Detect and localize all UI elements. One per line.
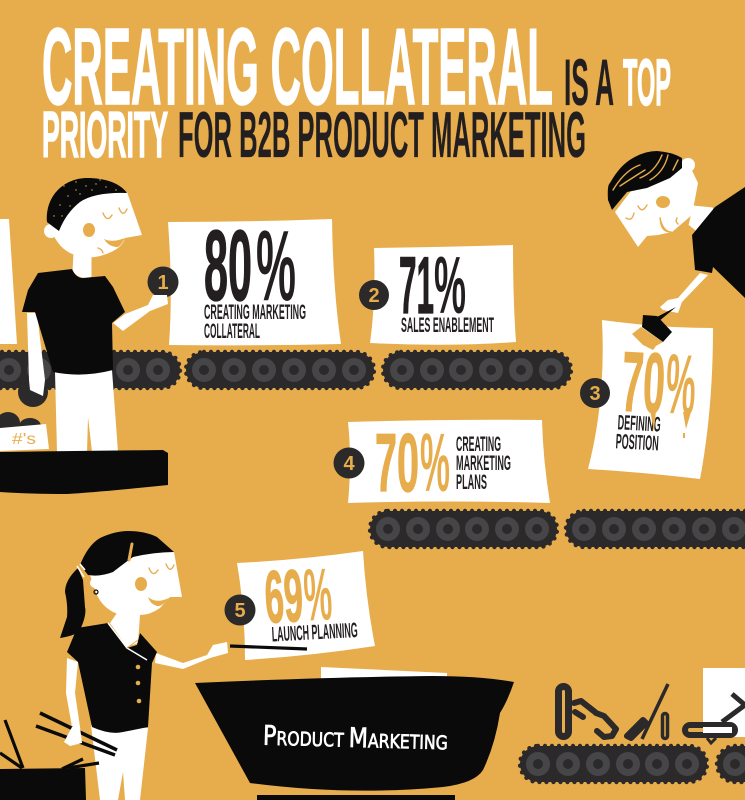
- title: PRIORITY: [42, 98, 168, 171]
- badge 1: 1: [157, 272, 169, 294]
- character: man painting: [608, 151, 745, 350]
- stat card 1: 80% creating marketing collateral: COLLATERAL: [204, 320, 260, 343]
- stat card 1: 80% creating marketing collateral: CREATING MARKETING: [204, 301, 306, 324]
- pointer stick: [230, 646, 307, 649]
- stat card 3: 70% defining position: POSITION: [615, 430, 659, 456]
- hopper: product marketing: PRODUCT MARKETING: [263, 721, 448, 756]
- stat card 5: 69% launch planning: [237, 551, 375, 660]
- title: [42, 6, 671, 171]
- stat card 5: 69% launch planning: %: [302, 552, 334, 637]
- stat card 4: 70% creating marketing plans: %: [420, 416, 450, 509]
- paper: left edge: [0, 219, 17, 344]
- badge 2: [359, 280, 389, 310]
- conveyor belt: bottom right: [717, 746, 745, 782]
- character: man with numbers: [0, 178, 168, 452]
- conveyor belt: bottom: [520, 746, 707, 782]
- stat card 4: 70% creating marketing plans: MARKETING: [456, 452, 511, 475]
- stat card 5: 69% launch planning: 69: [263, 554, 305, 639]
- stat card 2: 71% sales enablement: 71: [399, 241, 434, 331]
- stat card 2: 71% sales enablement: [370, 241, 516, 345]
- character: man with numbers: #'s: [12, 431, 36, 448]
- badge 4: 4: [343, 453, 355, 475]
- stat card 4: 70% creating marketing plans: CREATING: [456, 433, 501, 456]
- badge 5: [224, 594, 256, 626]
- conveyor belt: right: [566, 511, 745, 547]
- box with sticks: [0, 720, 99, 800]
- hopper: product marketing: [195, 676, 514, 800]
- badge 4: [334, 448, 364, 478]
- stat card 5: 69% launch planning: LAUNCH PLANNING: [271, 619, 358, 647]
- stat card 2: 71% sales enablement: SALES ENABLEMENT: [401, 314, 494, 337]
- stat card 3: 70% defining position: 70: [619, 335, 667, 432]
- stat card 2: 71% sales enablement: %: [434, 241, 466, 331]
- platform: [0, 450, 168, 494]
- stat card 3: 70% defining position: %: [663, 337, 698, 433]
- conveyor belt: 1: [186, 352, 374, 388]
- stat card 1: 80% creating marketing collateral: 80: [204, 210, 252, 322]
- stat card 3: 70% defining position: [588, 320, 713, 479]
- stat card 4: 70% creating marketing plans: [348, 416, 550, 509]
- badge 5: 5: [234, 600, 246, 622]
- stat card 1: 80% creating marketing collateral: [168, 210, 341, 345]
- broken chain links: [558, 684, 745, 743]
- badge 1: [148, 266, 178, 298]
- badge 2: 2: [368, 285, 380, 307]
- badge 3: [580, 378, 610, 408]
- paper in hopper: [321, 667, 447, 680]
- stat card 4: 70% creating marketing plans: PLANS: [456, 471, 487, 494]
- stat card 4: 70% creating marketing plans: 70: [375, 416, 419, 509]
- conveyor belt: 2: [383, 352, 571, 388]
- stat card 3: 70% defining position: DEFINING: [617, 411, 661, 437]
- stat card 1: 80% creating marketing collateral: %: [256, 210, 296, 322]
- character: woman: [36, 531, 228, 800]
- badge 3: 3: [589, 383, 601, 405]
- title: IS A: [564, 45, 614, 119]
- conveyor belt: left: [0, 352, 180, 388]
- conveyor belt: 4: [370, 511, 557, 547]
- paper: bottom right: [703, 668, 745, 737]
